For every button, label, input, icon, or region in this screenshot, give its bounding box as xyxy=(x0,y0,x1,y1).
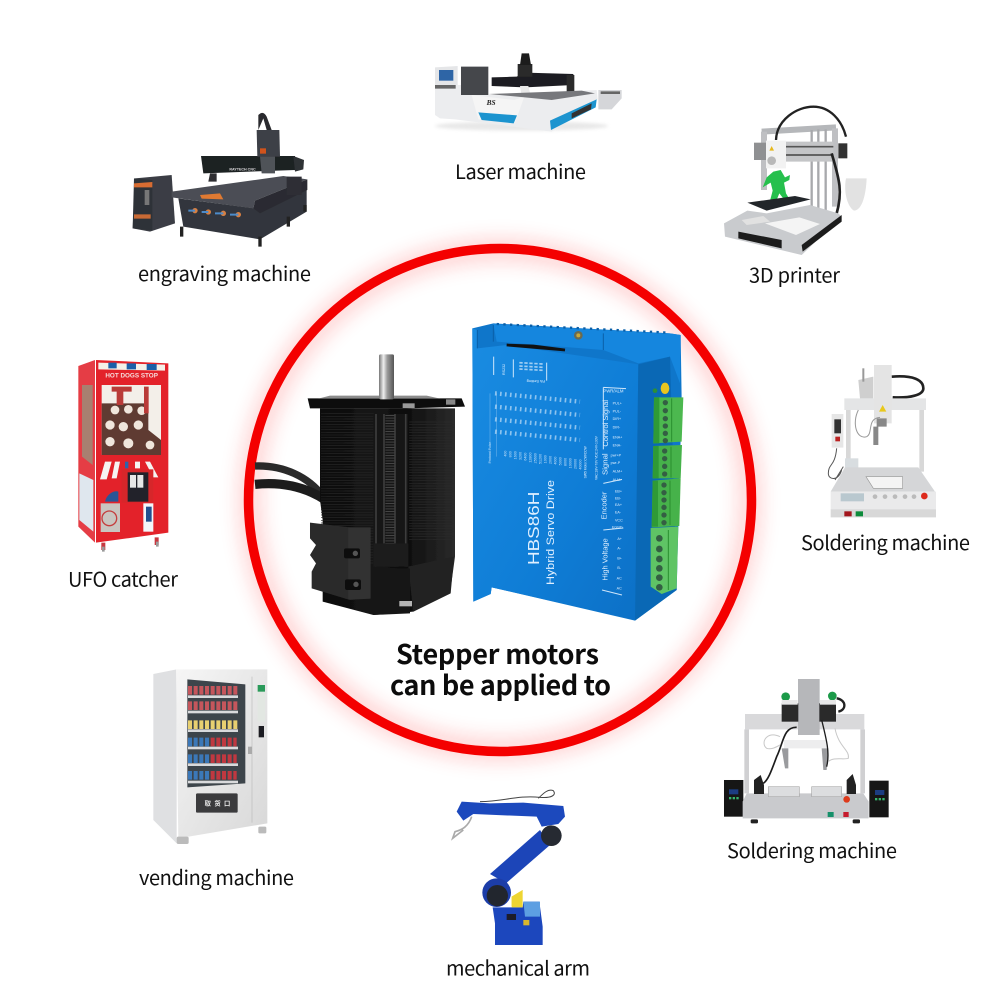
terminal pin labels: PUL+ xyxy=(613,402,622,406)
base xyxy=(493,902,543,945)
terminal pin labels: PUL- xyxy=(613,410,622,414)
printer frame xyxy=(762,127,836,132)
drive printed labels: Signal xyxy=(602,453,609,475)
red ring xyxy=(248,248,752,752)
microstep values: 40000 xyxy=(579,459,583,470)
printer extruder cable xyxy=(776,107,846,140)
heading: can be applied to xyxy=(390,664,611,703)
ring glow xyxy=(250,250,750,750)
motor flange xyxy=(308,398,465,408)
striped awning xyxy=(100,462,158,479)
terminal pin labels: A- xyxy=(617,547,622,551)
printer base xyxy=(724,205,842,255)
terminal pin labels: VCC xyxy=(615,518,623,522)
microstep values: 12800 xyxy=(529,452,533,463)
terminal pin labels: B- xyxy=(617,566,622,570)
base joint xyxy=(482,878,511,907)
side controllers xyxy=(724,780,743,817)
drive printed labels: High Voltage xyxy=(603,538,610,581)
microstep values xyxy=(504,451,583,470)
heads xyxy=(782,703,798,722)
microstep values: 2000 xyxy=(549,456,553,464)
terminal pin labels: A+ xyxy=(617,537,622,541)
vending cabinet xyxy=(153,669,177,843)
laser gantry xyxy=(492,73,573,87)
terminal pin labels: EGND xyxy=(612,525,623,529)
heading: Stepper motors xyxy=(396,633,599,672)
label: UFO catcher: UFO catcher xyxy=(68,564,178,592)
soldering machine two xyxy=(724,679,889,823)
microstep values: 5000 xyxy=(559,457,563,465)
terminal pin labels: EB+ xyxy=(615,490,622,494)
coin panel xyxy=(122,469,153,503)
terminal pin labels: EA+ xyxy=(615,503,622,507)
vending machine xyxy=(153,669,267,844)
terminal pin labels: DIR- xyxy=(613,425,621,429)
microstep values: 8000 xyxy=(564,458,568,466)
terminal pin labels xyxy=(611,402,623,590)
table base xyxy=(831,467,935,492)
microstep values: 1600 xyxy=(514,451,518,459)
terminal pin labels: ALM+ xyxy=(613,470,622,474)
cutting table xyxy=(178,190,307,239)
yellow capacitor and green LED xyxy=(661,383,669,394)
drive heatsink back xyxy=(472,323,682,621)
green terminal blocks xyxy=(651,397,683,594)
print head xyxy=(766,141,786,168)
label: engraving machine: engraving machine xyxy=(138,258,311,287)
side panel xyxy=(258,685,265,722)
label: laser machine: Laser machine xyxy=(455,156,586,185)
fore arm xyxy=(490,830,550,883)
drive printed labels: HBS86H xyxy=(526,492,543,565)
heading xyxy=(390,633,611,703)
label: 3D printer: 3D printer xyxy=(749,260,840,288)
motor cables xyxy=(255,466,347,527)
printer spool xyxy=(845,178,867,211)
terminal pin labels: AC xyxy=(617,576,622,580)
drive printed labels: PWR/ALM xyxy=(603,389,624,394)
engraving machine: RAYTECH CNC xyxy=(229,167,256,171)
cabinet side xyxy=(78,360,95,543)
mechanical arm xyxy=(453,790,565,945)
UFO catcher: HOT DOGS STOP xyxy=(105,372,158,379)
UFO catcher xyxy=(78,360,168,552)
drive printed labels: VAC:18V-70V VDC:24V-100V xyxy=(594,435,598,480)
cabinet front xyxy=(96,360,168,543)
prize window xyxy=(102,385,161,455)
laser machine: BS xyxy=(486,98,496,107)
drive printed labels: SW5 Motor:CW/CCW xyxy=(584,445,588,478)
drive printed labels: Protocol Pulse xyxy=(488,442,492,463)
cable loop xyxy=(892,376,923,398)
drive printed labels: PA Setting xyxy=(527,379,545,384)
terminal pin labels: pwr-P xyxy=(611,461,621,465)
terminal pin labels: ALM- xyxy=(613,478,622,482)
vending machine: 取货口 xyxy=(205,799,234,808)
label: mechanical arm: mechanical arm xyxy=(446,952,590,982)
laser machine xyxy=(435,53,622,132)
yellow cover xyxy=(512,890,523,907)
terminal pin labels: pwr+P xyxy=(611,454,622,458)
microstep values: 400 xyxy=(504,451,508,457)
drive divider lines and dip table xyxy=(490,357,626,595)
green figure xyxy=(763,170,790,204)
control cabinet xyxy=(133,175,175,232)
printer bed xyxy=(747,196,811,211)
laser shadow xyxy=(435,121,608,131)
gantry frame xyxy=(745,714,864,729)
base table xyxy=(743,793,869,818)
terminal pin labels: B+ xyxy=(617,556,622,560)
microstep values: 20000 xyxy=(574,459,578,469)
gantry xyxy=(844,398,926,410)
terminal pin labels: EA- xyxy=(615,510,622,514)
microstep values: 800 xyxy=(509,451,513,457)
wrist joint xyxy=(541,825,562,846)
display window xyxy=(187,679,245,787)
terminal pin labels: ENA- xyxy=(613,444,622,448)
drive front face xyxy=(472,328,638,620)
label: vending machine: vending machine xyxy=(139,862,294,891)
engraving machine xyxy=(133,113,307,247)
gantry and spindle xyxy=(201,156,295,173)
upper arm xyxy=(457,802,565,827)
3D printer xyxy=(724,107,867,255)
stepper motor xyxy=(255,354,465,615)
drive printed labels: Control Signal xyxy=(601,400,610,447)
front decor xyxy=(101,503,120,532)
bottles xyxy=(188,690,238,775)
microstep values: 3200 xyxy=(519,452,523,460)
laser body xyxy=(435,85,598,132)
cabinet wheels xyxy=(103,537,157,550)
microstep values: 51200 xyxy=(539,454,543,464)
microstep values: 4000 xyxy=(554,457,558,465)
encoder connector xyxy=(310,523,370,600)
drive printed labels: RS232 xyxy=(502,364,506,375)
microstep values: 10000 xyxy=(569,458,573,468)
soldering machine one xyxy=(828,365,936,517)
motor shaft xyxy=(379,354,394,399)
microstep values: 6400 xyxy=(524,453,528,461)
controller box xyxy=(832,414,843,448)
microstep values: 25600 xyxy=(534,453,538,463)
motor body xyxy=(320,408,455,615)
drive printed labels xyxy=(488,364,624,585)
drive printed labels: Encoder xyxy=(602,491,609,519)
terminal pin labels: AC xyxy=(617,586,622,590)
label: soldering machine lower: Soldering machine xyxy=(727,835,897,864)
pickup door xyxy=(196,793,238,813)
terminal pin labels: DIR+ xyxy=(613,417,621,421)
servo drive xyxy=(472,323,683,621)
torch and cable xyxy=(453,817,472,838)
label: soldering machine right: Soldering machine xyxy=(801,527,970,556)
drive printed labels: Hybrid Servo Drive xyxy=(545,480,557,585)
microstep values: 1000 xyxy=(544,455,548,463)
terminal pin labels: ENA+ xyxy=(613,436,622,440)
terminal pin labels: EB- xyxy=(615,496,622,500)
